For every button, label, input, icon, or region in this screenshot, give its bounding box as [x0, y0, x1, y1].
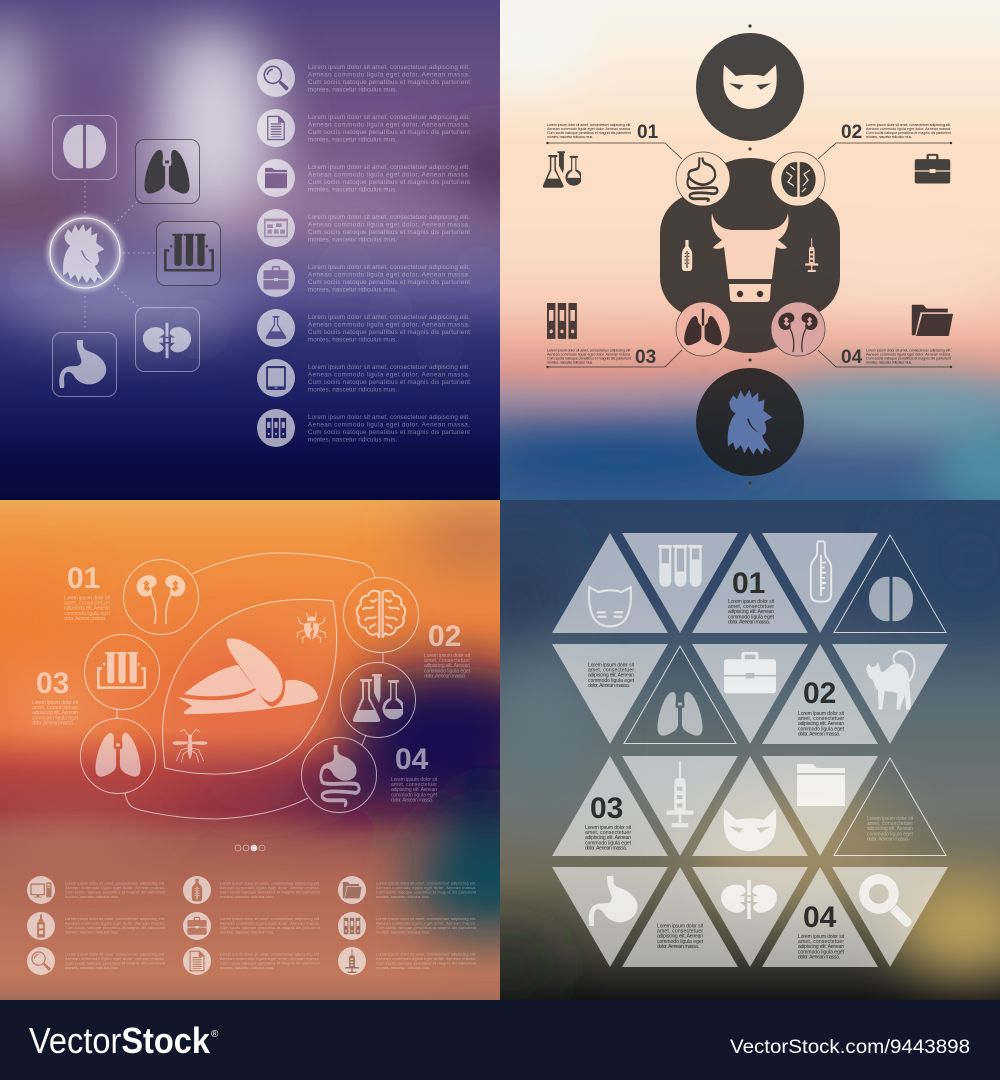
item: folder: montes, nascetur ridiculus mus. [376, 894, 430, 899]
tile: stomach [52, 332, 116, 396]
text block bottom row: Lorem ipsum dolor sit [657, 924, 704, 930]
tile: brain [52, 116, 116, 180]
block 03: adipiscing elit. Aenean [585, 835, 631, 841]
list item 1: search: montes, nascetur ridiculus mus. [308, 86, 397, 94]
item: binders: Aenean commodo ligula eget dolor. Aenean massa. [376, 920, 476, 926]
link curves [117, 553, 383, 819]
text block bottom row: amet, consectetuer [657, 928, 703, 934]
icon: flasks [543, 151, 582, 188]
block 01: amet, consectetuer [728, 604, 774, 610]
callout 02: 02 [841, 122, 862, 143]
icon: beetle [297, 613, 326, 643]
label 04: dolor. Aenean massa. [391, 798, 433, 804]
list item 3: folder: Cum sociis natoque penatibus et magnis dis parturient [308, 179, 470, 186]
item: computer: Lorem ipsum dolor sit amet, consectetuer adipiscing elit. [65, 880, 165, 886]
text block left row two: dolor. Aenean massa. [588, 683, 630, 689]
block 03: dolor. Aenean massa. [585, 846, 627, 852]
label 04: adipiscing elit. Aenean [391, 787, 437, 793]
block 03: commodo ligula eget [585, 840, 632, 846]
block 04: amet, consectetuer [798, 939, 844, 945]
callout 03 [546, 347, 682, 368]
item: magnifier: Aenean commodo ligula eget dolor. Aenean massa. [65, 956, 165, 961]
label 02 [424, 620, 471, 680]
leaf outline [163, 599, 337, 774]
item: briefcase [183, 912, 321, 940]
label 03: amet, consectetuer [32, 705, 78, 711]
footer bar: ® [211, 1029, 219, 1040]
block 03 [585, 792, 632, 852]
text block outlined triangle: commodo ligula eget [867, 832, 914, 838]
block 04: Lorem ipsum dolor sit [798, 934, 845, 940]
circle: brain [344, 578, 418, 652]
label 03: Lorem ipsum dolor sit [32, 700, 79, 706]
block 04: adipiscing elit. Aenean [798, 944, 844, 950]
item: vial: Aenean commodo ligula eget dolor. Aenean massa. [65, 920, 165, 926]
list item 6: flask: Cum sociis natoque penatibus et magnis dis parturient [308, 329, 470, 336]
callout 01: montes, nascetur ridiculus mus. [547, 135, 593, 139]
item: thermometer: Cum sociis natoque penatibus et magnis dis parturient [220, 890, 321, 894]
callout 01: Cum sociis natoque penatibus et magnis dis parturient [547, 131, 631, 135]
footer bar: VectorStock [29, 1020, 211, 1061]
icon: arched cat [866, 651, 915, 710]
item: vial: Lorem ipsum dolor sit amet, consectetuer adipiscing elit. [65, 916, 165, 921]
circle: lungs [80, 718, 156, 794]
item: syringe: Cum sociis natoque penatibus et magnis dis parturient [376, 960, 477, 966]
text block left row two: amet, consectetuer [588, 668, 634, 674]
block 02 [798, 677, 845, 738]
callout 03: Lorem ipsum dolor sit amet, consectetuer adipiscing elit. [547, 348, 631, 352]
label 01: amet, consectetuer [64, 600, 110, 606]
icon: cat outline [589, 587, 631, 626]
item: syringe: Aenean commodo ligula eget dolor. Aenean massa. [376, 956, 476, 961]
block 02: dolor. Aenean massa. [798, 732, 840, 738]
panel: peach background with cow diagram [470, 0, 1000, 510]
item: briefcase: montes, nascetur ridiculus mus. [220, 930, 274, 934]
icon: magnifier [859, 874, 912, 927]
icon: kidneys [721, 880, 777, 919]
icon: open folder [912, 305, 953, 336]
label 04: commodo ligula eget [391, 792, 438, 798]
glowing rooster badge [50, 218, 120, 288]
block 01: Lorem ipsum dolor sit [728, 599, 775, 605]
tile: test tubes [156, 222, 220, 286]
item: document: Cum sociis natoque penatibus et magnis dis parturient [220, 960, 321, 966]
footer bar: VectorStock.com/9443898 [730, 1036, 970, 1058]
item: computer: Aenean commodo ligula eget dolor. Aenean massa. [65, 885, 165, 890]
icon: stomach [589, 876, 638, 926]
list item 7: tablet: Cum sociis natoque penatibus et magnis dis parturient [308, 379, 470, 386]
icon: briefcase [915, 154, 950, 184]
item: folder: Cum sociis natoque penatibus et magnis dis parturient [376, 890, 477, 894]
cat circle [696, 33, 804, 141]
callout 03: montes, nascetur ridiculus mus. [547, 360, 593, 364]
callout 01 [546, 122, 682, 159]
turtle [178, 639, 318, 714]
text block left row two: adipiscing elit. Aenean [588, 672, 634, 678]
callout 04: Aenean commodo ligula eget dolor. Aenean massa. [866, 352, 951, 356]
circle: kidneys [124, 560, 198, 634]
outlined triangles [624, 535, 946, 856]
label 02: commodo ligula eget [424, 668, 471, 674]
item: binders: montes, nascetur ridiculus mus. [376, 930, 430, 934]
item: document [183, 947, 321, 975]
icon: syringe [667, 761, 693, 827]
text block bottom row: adipiscing elit. Aenean [657, 934, 703, 940]
icon: test tubes [658, 545, 703, 587]
label 03: adipiscing elit. Aenean [32, 710, 78, 716]
list item 6: flask: Lorem ipsum dolor sit amet, consectetuer adipiscing elit. [308, 314, 470, 321]
callout 04: Cum sociis natoque penatibus et magnis dis parturient [866, 356, 951, 360]
list item 5: briefcase: Cum sociis natoque penatibus et magnis dis parturient [308, 279, 470, 286]
block 04: commodo ligula eget [798, 950, 845, 956]
label 02: adipiscing elit. Aenean [424, 663, 470, 669]
block 01: adipiscing elit. Aenean [728, 609, 774, 615]
list item 5: briefcase: Aenean commodo ligula eget dolor. Aenean massa. [308, 272, 470, 278]
list item 3: folder: Lorem ipsum dolor sit amet, consectetuer adipiscing elit. [308, 164, 470, 171]
item: vial [27, 912, 166, 940]
block 01: dolor. Aenean massa. [728, 620, 770, 626]
item: document: Aenean commodo ligula eget dolor. Aenean massa. [220, 956, 320, 961]
icon: lungs [657, 692, 703, 736]
callout 02: Cum sociis natoque penatibus et magnis dis parturient [866, 131, 951, 135]
list item 6: flask [257, 309, 470, 347]
text block outlined triangle: adipiscing elit. Aenean [867, 826, 913, 832]
text block bottom row: commodo ligula eget [657, 939, 704, 945]
item: vial: montes, nascetur ridiculus mus. [65, 930, 119, 934]
item: thermometer: Aenean commodo ligula eget dolor. Aenean massa. [220, 885, 320, 890]
list item 5: briefcase: Lorem ipsum dolor sit amet, consectetuer adipiscing elit. [308, 264, 470, 271]
list item 2: document: Aenean commodo ligula eget dolor. Aenean massa. [308, 122, 470, 128]
circle: stomach [302, 738, 376, 812]
item: briefcase: Aenean commodo ligula eget dolor. Aenean massa. [220, 920, 320, 926]
item: thermometer [183, 876, 321, 904]
badge: brain [771, 152, 825, 206]
text block outlined triangle: dolor. Aenean massa. [867, 836, 909, 842]
label 01: commodo ligula eget [64, 611, 111, 617]
block 03: 03 [590, 792, 623, 825]
list item 7: tablet: Aenean commodo ligula eget dolor. Aenean massa. [308, 372, 470, 378]
panel: orange background with turtle diagram [0, 500, 500, 1000]
circle: flasks [340, 662, 416, 738]
list item 7: tablet: Lorem ipsum dolor sit amet, consectetuer adipiscing elit. [308, 364, 470, 371]
icon: thermometer [682, 240, 692, 271]
list item 4: chart [257, 209, 470, 247]
list item 8: binders: montes, nascetur ridiculus mus. [308, 436, 397, 444]
list item 8: binders: Aenean commodo ligula eget dolor. Aenean massa. [308, 422, 470, 428]
callout 04: 04 [841, 347, 863, 368]
callout 01: 01 [637, 122, 659, 143]
list item 5: briefcase: montes, nascetur ridiculus mus. [308, 286, 397, 294]
item: magnifier: Lorem ipsum dolor sit amet, consectetuer adipiscing elit. [65, 952, 165, 956]
label 02: dolor. Aenean massa. [424, 674, 466, 680]
list item 2: document: Lorem ipsum dolor sit amet, consectetuer adipiscing elit. [308, 114, 470, 121]
text block outlined triangle: amet, consectetuer [867, 821, 913, 827]
item: computer: Cum sociis natoque penatibus et magnis dis parturient [65, 890, 166, 894]
callout 02: Lorem ipsum dolor sit amet, consectetuer adipiscing elit. [866, 123, 951, 127]
item: binders [338, 912, 477, 940]
text block bottom row: dolor. Aenean massa. [657, 944, 699, 950]
callout 01: Aenean commodo ligula eget dolor. Aenean massa. [547, 127, 631, 131]
label 03: commodo ligula eget [32, 716, 79, 722]
list item 8: binders: Cum sociis natoque penatibus et magnis dis parturient [308, 429, 470, 436]
block 02: Lorem ipsum dolor sit [798, 711, 845, 717]
label 01: Lorem ipsum dolor sit [64, 596, 111, 602]
label 04: amet, consectetuer [391, 782, 437, 788]
block 01: 01 [732, 567, 765, 600]
label 01: 01 [67, 562, 100, 595]
list item 4: chart: Aenean commodo ligula eget dolor. Aenean massa. [308, 222, 470, 228]
text block left row two: commodo ligula eget [588, 678, 635, 684]
label 04: 04 [395, 743, 429, 776]
item: magnifier: montes, nascetur ridiculus mus. [65, 965, 119, 970]
list item 2: document [257, 109, 470, 147]
callout 03: Cum sociis natoque penatibus et magnis dis parturient [547, 356, 631, 360]
item: magnifier: Cum sociis natoque penatibus et magnis dis parturient [65, 960, 166, 966]
icon: thermometer outline [811, 541, 831, 602]
callout 02: Aenean commodo ligula eget dolor. Aenean massa. [866, 127, 951, 131]
block 01 [728, 567, 775, 626]
list item 2: document: montes, nascetur ridiculus mus. [308, 136, 397, 144]
tile: kidneys [136, 308, 200, 372]
text block left row two: Lorem ipsum dolor sit [588, 662, 635, 668]
item: document: Lorem ipsum dolor sit amet, consectetuer adipiscing elit. [220, 952, 320, 956]
label 03: 03 [36, 667, 69, 700]
list item 1: search: Aenean commodo ligula eget dolor. Aenean massa. [308, 72, 470, 78]
list item 3: folder: Aenean commodo ligula eget dolor. Aenean massa. [308, 172, 470, 178]
item: vial: Cum sociis natoque penatibus et magnis dis parturient [65, 925, 166, 930]
item: folder [338, 876, 477, 904]
badge: stomach [676, 152, 730, 206]
list item 4: chart: Lorem ipsum dolor sit amet, consectetuer adipiscing elit. [308, 214, 470, 221]
pager dots [235, 845, 265, 851]
label 02: amet, consectetuer [424, 658, 470, 664]
list item 8: binders [257, 409, 470, 447]
list item 2: document: Cum sociis natoque penatibus et magnis dis parturient [308, 129, 470, 136]
cow head [711, 213, 789, 302]
item: magnifier [27, 947, 166, 975]
label 04: Lorem ipsum dolor sit [391, 777, 438, 783]
block 02: 02 [803, 677, 836, 710]
block 02: amet, consectetuer [798, 716, 844, 722]
item: computer [27, 876, 166, 904]
callout 04: montes, nascetur ridiculus mus. [866, 360, 912, 364]
block 03: Lorem ipsum dolor sit [585, 825, 632, 831]
list item 1: search: Lorem ipsum dolor sit amet, consectetuer adipiscing elit. [308, 64, 470, 71]
list item 7: tablet [257, 359, 470, 397]
item: thermometer: Lorem ipsum dolor sit amet, consectetuer adipiscing elit. [220, 880, 320, 886]
item: syringe: Lorem ipsum dolor sit amet, consectetuer adipiscing elit. [376, 952, 476, 956]
text block outlined triangle: Lorem ipsum dolor sit [867, 816, 914, 822]
icon: folder [797, 764, 845, 806]
list item 4: chart: montes, nascetur ridiculus mus. [308, 236, 397, 244]
icon: cat face [724, 809, 776, 851]
icon: mosquito [173, 729, 207, 763]
list item 6: flask: montes, nascetur ridiculus mus. [308, 336, 397, 344]
icon: brain [869, 577, 913, 621]
label 04 [391, 743, 438, 804]
bokeh circles [10, 242, 504, 369]
list item 3: folder [257, 159, 470, 197]
block 04: dolor. Aenean massa. [798, 954, 840, 960]
item: thermometer: montes, nascetur ridiculus mus. [220, 894, 274, 899]
label 03: dolor. Aenean massa. [32, 720, 74, 726]
callout 04 [818, 347, 952, 368]
icon: syringe [805, 238, 818, 272]
circle: test tubes [84, 634, 160, 710]
item: briefcase: Lorem ipsum dolor sit amet, consectetuer adipiscing elit. [220, 916, 320, 921]
label 01: dolor. Aenean massa. [64, 616, 106, 622]
tile: lungs [136, 140, 200, 204]
icon: briefcase [724, 652, 776, 693]
item: binders: Lorem ipsum dolor sit amet, consectetuer adipiscing elit. [376, 916, 476, 921]
block 03: amet, consectetuer [585, 830, 631, 836]
callout 04: Lorem ipsum dolor sit amet, consectetuer adipiscing elit. [866, 348, 951, 352]
label 03 [32, 667, 79, 726]
block 04 [798, 901, 845, 960]
callout 03: Aenean commodo ligula eget dolor. Aenean massa. [547, 352, 631, 356]
icon: binders [547, 303, 577, 339]
rooster circle [696, 368, 804, 476]
callout 02: montes, nascetur ridiculus mus. [866, 135, 912, 139]
list item 1: search: Cum sociis natoque penatibus et magnis dis parturient [308, 79, 470, 86]
list item 5: briefcase [257, 259, 470, 297]
panel: slate background with triangle mosaic [445, 490, 1000, 1000]
triangle grid [552, 533, 948, 967]
list item 8: binders: Lorem ipsum dolor sit amet, consectetuer adipiscing elit. [308, 414, 470, 421]
block 02: adipiscing elit. Aenean [798, 721, 844, 727]
list item 3: folder: montes, nascetur ridiculus mus. [308, 186, 397, 194]
item: computer: montes, nascetur ridiculus mus. [65, 894, 119, 899]
item: document: montes, nascetur ridiculus mus. [220, 965, 274, 970]
label 02: 02 [428, 620, 461, 653]
item: syringe [338, 947, 477, 975]
list item 6: flask: Aenean commodo ligula eget dolor. Aenean massa. [308, 322, 470, 328]
callout 02 [818, 122, 952, 159]
label 01 [64, 562, 111, 622]
list item 4: chart: Cum sociis natoque penatibus et magnis dis parturient [308, 229, 470, 236]
callout 03: 03 [635, 347, 656, 368]
badge: kidneys [771, 302, 825, 356]
item: folder: Aenean commodo ligula eget dolor. Aenean massa. [376, 885, 476, 890]
list item 7: tablet: montes, nascetur ridiculus mus. [308, 386, 397, 394]
block 01: commodo ligula eget [728, 614, 775, 620]
label 01: adipiscing elit. Aenean [64, 606, 110, 612]
panel: purple blurred background with organ tiles and list [0, 0, 545, 500]
footer bar [0, 1000, 1000, 1080]
item: briefcase: Cum sociis natoque penatibus et magnis dis parturient [220, 925, 321, 930]
block 04: 04 [803, 901, 837, 934]
item: syringe: montes, nascetur ridiculus mus. [376, 965, 430, 970]
top dots [748, 24, 752, 485]
callout 01: Lorem ipsum dolor sit amet, consectetuer adipiscing elit. [547, 123, 631, 127]
list item 1: search [257, 59, 470, 97]
block 02: commodo ligula eget [798, 726, 845, 732]
badge: lungs [676, 302, 730, 356]
item: folder: Lorem ipsum dolor sit amet, consectetuer adipiscing elit. [376, 880, 476, 886]
item: binders: Cum sociis natoque penatibus et magnis dis parturient [376, 925, 477, 930]
central animal body [660, 158, 840, 353]
dotted connectors [85, 181, 156, 330]
label 02: Lorem ipsum dolor sit [424, 653, 471, 659]
